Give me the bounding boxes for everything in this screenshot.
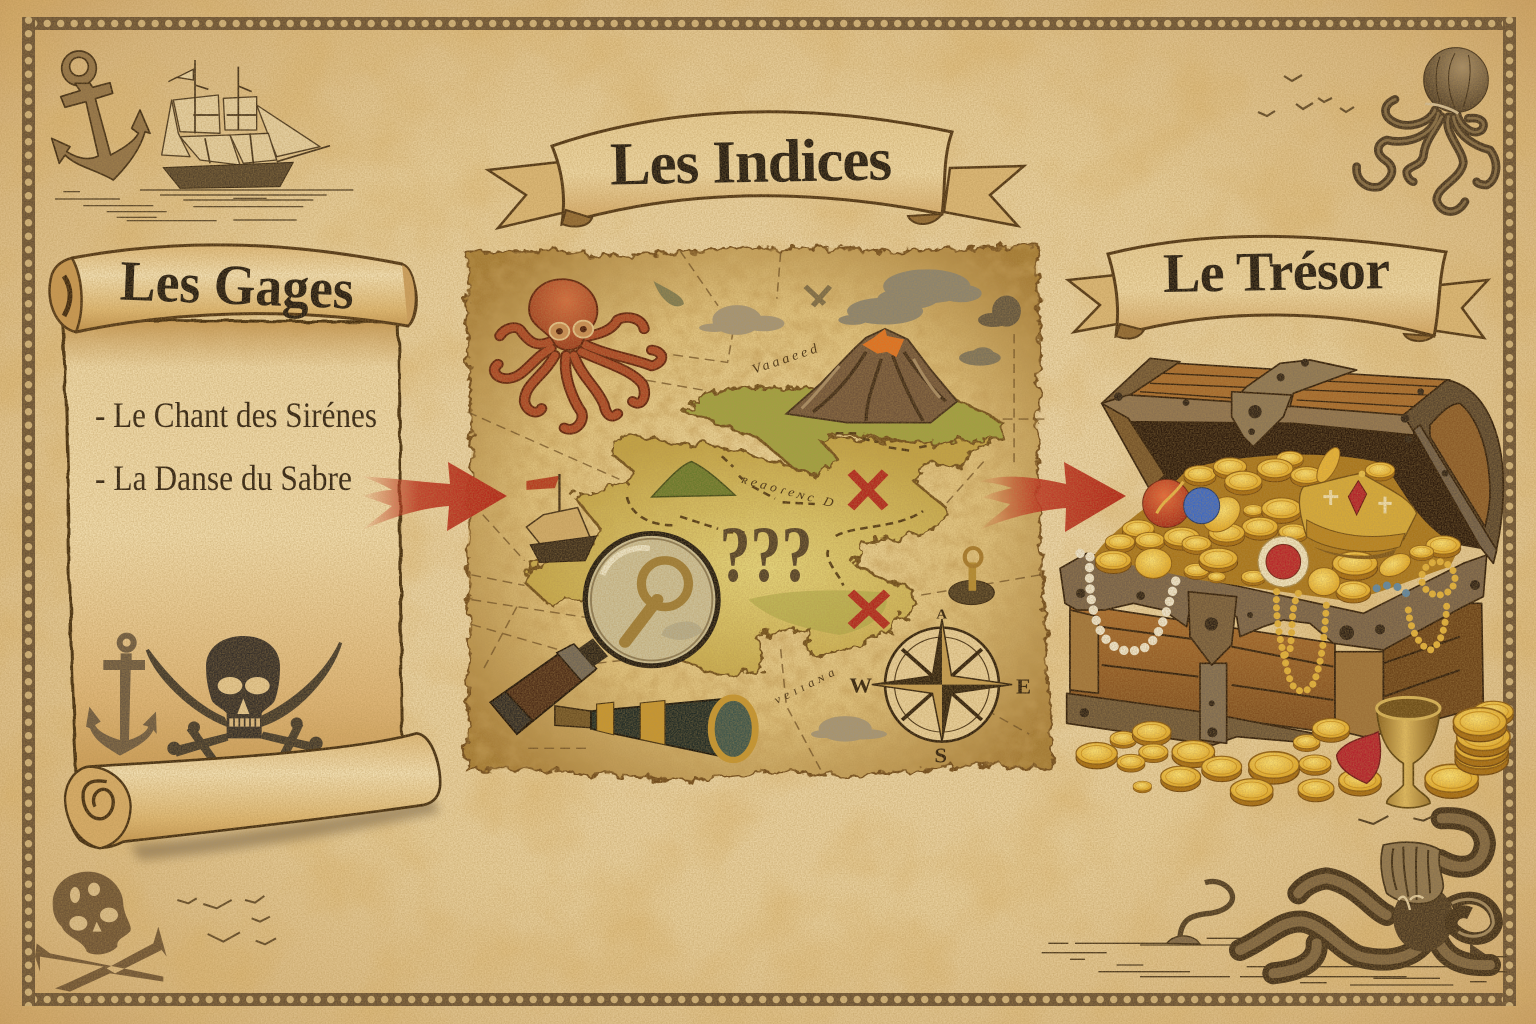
list item: le chant des sirenes: - Le Chant des Sirénes bbox=[95, 395, 377, 435]
icon: anchor on scroll bbox=[86, 633, 157, 756]
icon: pin marker bbox=[949, 548, 994, 605]
icon: compass rose: A bbox=[936, 607, 948, 622]
arrow: gages to indices bbox=[360, 462, 507, 531]
banner: le tresor bbox=[1068, 236, 1488, 341]
chest base bbox=[1060, 553, 1487, 745]
map text: ᴠeɪɪaɴa bbox=[772, 666, 837, 707]
x marks bbox=[851, 472, 887, 626]
scroll bottom roll bbox=[65, 733, 440, 848]
icon: skull and crossbones bottom left bbox=[35, 872, 167, 992]
icon: treasure chest bbox=[1060, 358, 1513, 808]
heading: les indices: Les Indices bbox=[609, 127, 893, 198]
brooch bbox=[1258, 536, 1309, 587]
list item: la danse du sabre: - La Danse du Sabre bbox=[95, 458, 352, 498]
icon: magnifying glass bbox=[490, 533, 718, 734]
green patches bbox=[748, 590, 887, 635]
map routes bbox=[468, 251, 1044, 777]
scroll body bbox=[62, 320, 403, 795]
icon: compass rose: E bbox=[1016, 674, 1031, 698]
icon: small ship on map bbox=[526, 474, 597, 562]
gold necklaces bbox=[1276, 562, 1455, 691]
cloud: tan bbox=[699, 305, 784, 335]
green hill bbox=[652, 462, 735, 497]
icon: octopus top right bbox=[1357, 48, 1496, 212]
scroll roll shadow bbox=[130, 798, 440, 860]
map text: Vaaaeed bbox=[750, 342, 820, 377]
icon: compass rose: W bbox=[849, 673, 872, 697]
cloud: dark islet bbox=[978, 296, 1021, 327]
panel: map bbox=[460, 235, 1060, 791]
main island bbox=[525, 433, 1003, 678]
birds bottom left bbox=[177, 896, 276, 944]
icon: anchor top left bbox=[52, 51, 150, 180]
heading: les gages: Les Gages bbox=[119, 250, 355, 322]
cloud: small right bbox=[959, 347, 1001, 366]
birds near kraken bbox=[1358, 816, 1433, 824]
icon: compass rose: S bbox=[934, 743, 947, 767]
scroll top roll bbox=[49, 245, 416, 332]
map text bbox=[740, 342, 837, 707]
cloud: grey large bbox=[838, 269, 982, 325]
crown bbox=[1299, 471, 1417, 559]
birds top right bbox=[1258, 75, 1354, 116]
small crossed tools bbox=[805, 286, 830, 306]
pearl necklace bbox=[1080, 553, 1178, 651]
icon: telescope bbox=[555, 698, 755, 760]
gold pile bbox=[1093, 444, 1461, 603]
icon: compass rose bbox=[849, 607, 1031, 767]
icon: sailing ship bbox=[55, 60, 353, 221]
chest lid bbox=[1102, 358, 1503, 563]
icon: red octopus bbox=[495, 279, 662, 429]
icon: skull and crossed sabres bbox=[147, 636, 341, 760]
icon: kraken bottom right bbox=[1042, 818, 1507, 985]
whale islet bbox=[654, 281, 684, 306]
panel: les gages scroll bbox=[49, 245, 440, 860]
heading: le tresor: Le Trésor bbox=[1162, 239, 1391, 305]
question marks: ??? bbox=[720, 510, 813, 599]
loose coins bbox=[1076, 701, 1513, 806]
banner: les indices bbox=[488, 112, 1024, 228]
map text: ʀeaoɾeɴc D bbox=[740, 472, 836, 510]
island with volcano bbox=[627, 329, 1003, 585]
arrow: indices to tresor bbox=[978, 462, 1126, 532]
cloud: bottom bbox=[811, 716, 887, 742]
map mottling bbox=[460, 235, 1060, 791]
goblet bbox=[1377, 697, 1440, 808]
